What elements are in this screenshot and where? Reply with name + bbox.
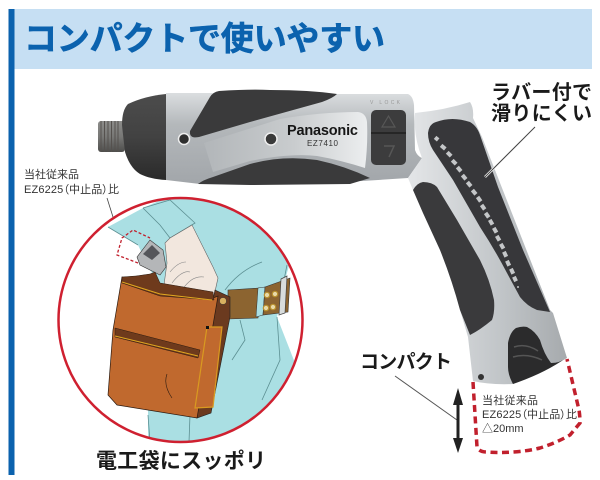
left blue accent bar <box>8 9 14 475</box>
belt <box>228 276 290 319</box>
pouch top rim <box>122 272 214 300</box>
direction buttons <box>371 110 406 165</box>
pouch side pocket <box>195 327 222 408</box>
lighter side panel <box>204 112 367 172</box>
glove finger lines <box>170 262 204 290</box>
handle front rubber grip <box>413 182 494 335</box>
screw 2 <box>265 133 277 145</box>
rubber grip label: 滑りにくい <box>491 102 592 125</box>
pouch middle band <box>115 328 200 358</box>
note: pouch comparison <box>24 167 119 236</box>
note: previous model comparison: △20mm <box>482 422 524 435</box>
note leader line <box>107 198 119 236</box>
previous model outline <box>473 359 580 452</box>
bottom dark rubber patch <box>198 158 370 185</box>
note: pouch comparison: 当社従来品 <box>24 167 79 181</box>
drill illustration <box>98 90 567 384</box>
pouch rivet <box>220 298 226 304</box>
base screw <box>478 374 484 380</box>
top dark rubber patch <box>190 90 337 137</box>
circle inset: tool pouch <box>57 196 304 444</box>
note: pouch comparison: EZ6225（中止品）比 <box>24 183 119 196</box>
lock label: V LOCK <box>370 100 401 106</box>
title: コンパクトで使いやすい <box>24 20 385 57</box>
rubber grip leader halo <box>485 127 535 177</box>
battery release button <box>508 327 566 384</box>
rubber grip leader line <box>485 127 535 177</box>
callout: compact size <box>360 351 463 453</box>
pouch fold line <box>166 374 172 398</box>
chuck <box>122 94 166 180</box>
clothing fold lines <box>108 200 287 442</box>
handle back rubber grip <box>428 119 550 312</box>
red circle outline <box>58 198 302 442</box>
previous model dashed outline <box>117 230 150 263</box>
brand name: Panasonic <box>287 123 358 139</box>
callout: rubber grip <box>485 81 598 177</box>
header band <box>14 9 592 69</box>
model number: EZ7410 <box>307 139 339 148</box>
screw 1 <box>178 134 190 144</box>
double arrow <box>453 388 463 453</box>
glove <box>163 225 218 296</box>
drill in hand <box>137 240 166 275</box>
caption: fits in the pouch: 電工袋にスッポリ <box>96 450 266 473</box>
note: previous model comparison: 当社従来品 <box>482 393 538 407</box>
pouch side gusset <box>196 290 230 418</box>
pouch <box>108 272 230 418</box>
silver main body <box>166 92 422 184</box>
note: previous model comparison: EZ6225（中止品）比 <box>482 408 577 421</box>
work clothes <box>108 199 294 441</box>
drill bit holder thread <box>98 121 125 152</box>
compact label: コンパクト <box>360 351 452 373</box>
pouch front <box>108 277 218 418</box>
rubber grip label: ラバー付で <box>491 81 592 104</box>
clipped inset scene <box>108 199 294 441</box>
compact leader line <box>395 376 457 420</box>
grip vent slots <box>434 136 519 288</box>
silver handle <box>408 102 567 384</box>
